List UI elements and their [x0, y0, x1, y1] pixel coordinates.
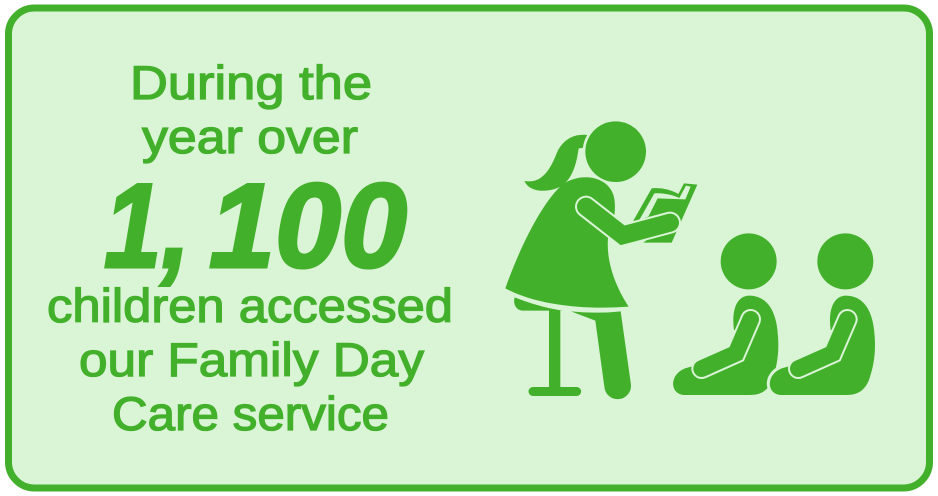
icon: seated child right [770, 233, 875, 395]
arm [702, 319, 751, 369]
ponytail [524, 135, 587, 191]
icon: seated child left [673, 233, 778, 395]
head [817, 233, 873, 289]
text block: headline [47, 56, 453, 440]
head [721, 233, 777, 289]
dress [505, 177, 629, 308]
stool [514, 297, 581, 396]
arm [586, 207, 670, 235]
text: care service: Care service [112, 387, 389, 440]
head [583, 119, 649, 185]
text: during the: During the [130, 56, 372, 109]
text: big number: 1, [104, 159, 190, 293]
text: children accessed: children accessed [47, 279, 453, 332]
foot outline [770, 368, 823, 395]
body [770, 296, 875, 395]
leg [571, 311, 631, 399]
arm [798, 319, 847, 369]
text: big number: 100 [209, 159, 407, 293]
body [673, 296, 778, 395]
text: big number [104, 159, 407, 293]
icon: woman reading a book on a stool [505, 119, 697, 399]
text: year over: year over [142, 110, 358, 163]
book [633, 183, 697, 243]
text: our family day: our Family Day [79, 333, 425, 386]
